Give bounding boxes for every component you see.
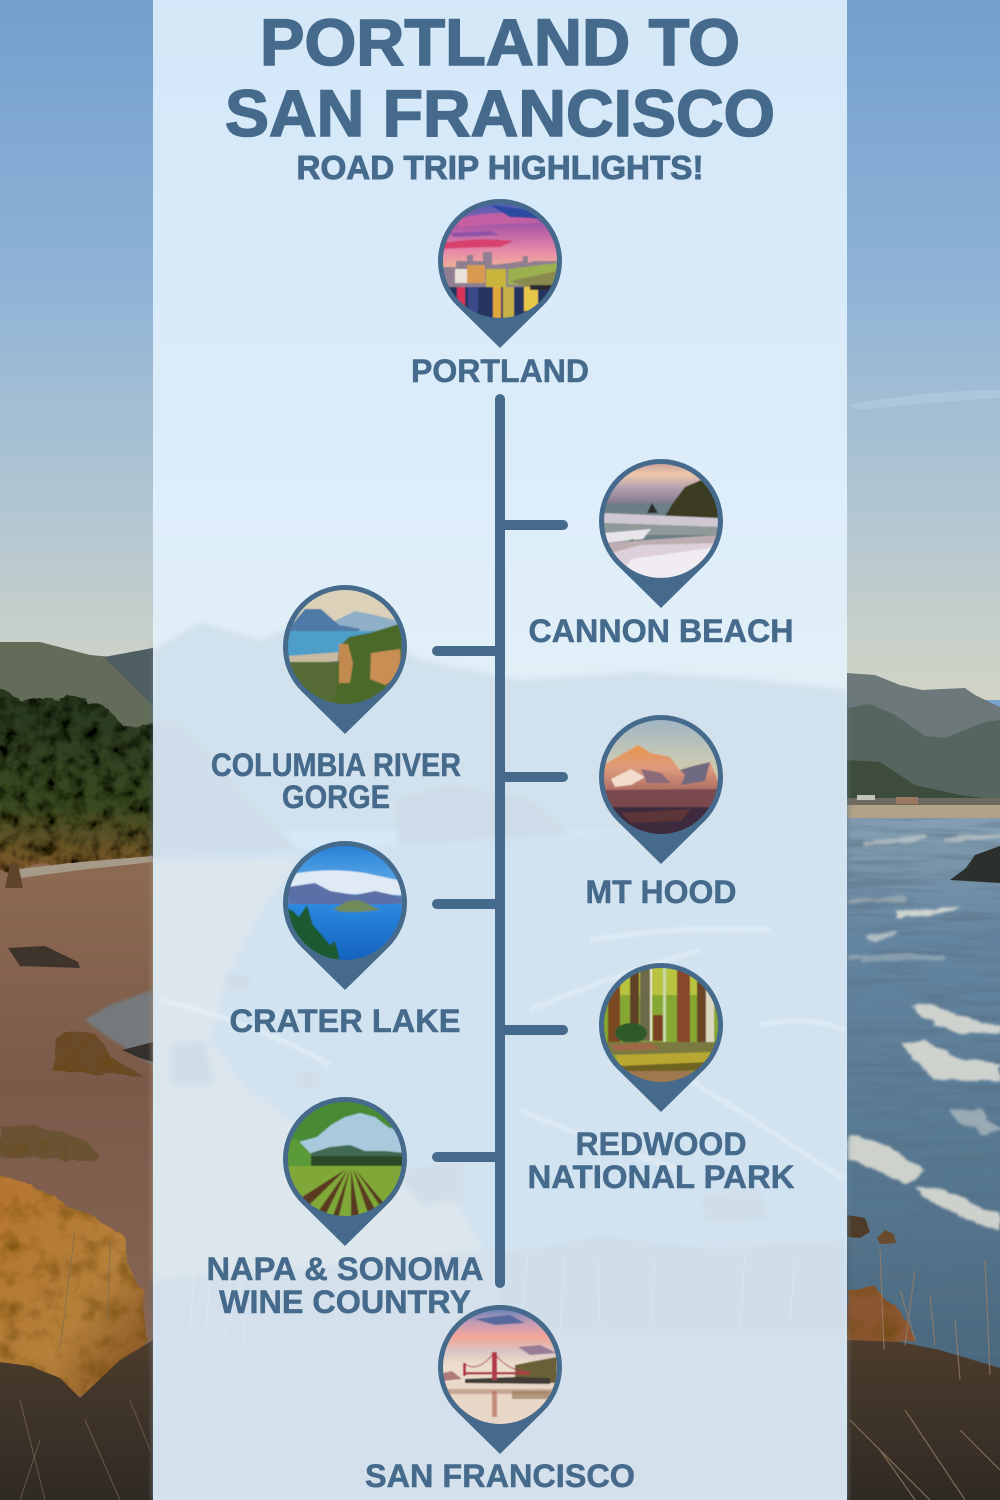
label: Columbia River Gorge <box>211 747 461 815</box>
pin: Redwood National Park <box>599 963 723 1112</box>
panel surf streaks <box>160 929 845 1180</box>
label: Columbia River Gorge: GORGE <box>282 779 390 815</box>
photo: Cannon Beach surf <box>604 464 718 578</box>
translucent central panel <box>153 0 847 1500</box>
pin: Portland <box>438 199 562 348</box>
photo: Golden Gate Bridge <box>440 1307 560 1427</box>
photo: Mt Hood <box>601 717 721 837</box>
route timeline <box>432 394 568 1288</box>
photo: Portland skyline <box>440 201 560 321</box>
right distant mountains <box>847 673 1000 806</box>
left beach rocks <box>0 864 153 1162</box>
right small rocks <box>847 1215 896 1244</box>
label: Napa & Sonoma Wine Country: WINE COUNTRY <box>219 1284 471 1320</box>
pin: Columbia River Gorge <box>283 585 407 734</box>
photo: Crater Lake <box>288 846 402 960</box>
label: Cannon Beach: CANNON BEACH <box>528 613 794 649</box>
label: Mt Hood: MT HOOD <box>586 874 736 910</box>
left forested headland <box>0 684 165 872</box>
photo: vineyard <box>285 1099 405 1219</box>
label: Redwood National Park: NATIONAL PARK <box>528 1159 794 1195</box>
pin: Cannon Beach <box>599 459 723 608</box>
label: Napa & Sonoma Wine Country <box>206 1251 484 1320</box>
pin: San Francisco <box>438 1305 562 1454</box>
base ground left <box>0 860 153 1500</box>
title <box>225 5 775 150</box>
right town and shoreline <box>847 795 1000 818</box>
panel grass strands <box>190 1220 795 1345</box>
label: Columbia River Gorge: COLUMBIA RIVER <box>211 747 461 783</box>
pin: Mt Hood <box>599 715 723 864</box>
left foreground grass <box>0 1340 153 1500</box>
right foreground rock <box>847 1288 914 1350</box>
label: Redwood National Park: REDWOOD <box>576 1126 746 1162</box>
left distant mountains <box>0 642 153 740</box>
faint scene under panel <box>153 610 847 1500</box>
label: Redwood National Park <box>528 1126 794 1195</box>
photo: Columbia River Gorge <box>285 587 405 707</box>
label: Portland: PORTLAND <box>411 353 589 389</box>
right rock <box>950 846 1000 883</box>
right surf foam <box>847 834 1000 1230</box>
label: San Francisco: SAN FRANCISCO <box>365 1458 635 1494</box>
title: SAN FRANCISCO <box>225 76 775 150</box>
pin: Napa & Sonoma Wine Country <box>283 1097 407 1246</box>
subtitle: ROAD TRIP HIGHLIGHTS! <box>296 149 704 186</box>
driftwood strip <box>10 856 153 878</box>
pin: Crater Lake <box>283 841 407 990</box>
label: Napa & Sonoma Wine Country: NAPA & SONOMA <box>206 1251 484 1287</box>
label: Crater Lake: CRATER LAKE <box>230 1003 460 1039</box>
photo: Redwood forest <box>601 965 721 1085</box>
base ocean and sand under mountains right <box>847 800 1000 1500</box>
title: PORTLAND TO <box>260 5 740 79</box>
right foreground brush <box>847 1250 1000 1500</box>
left foreground boulder <box>0 1170 148 1395</box>
left grass stalks <box>20 1230 150 1500</box>
